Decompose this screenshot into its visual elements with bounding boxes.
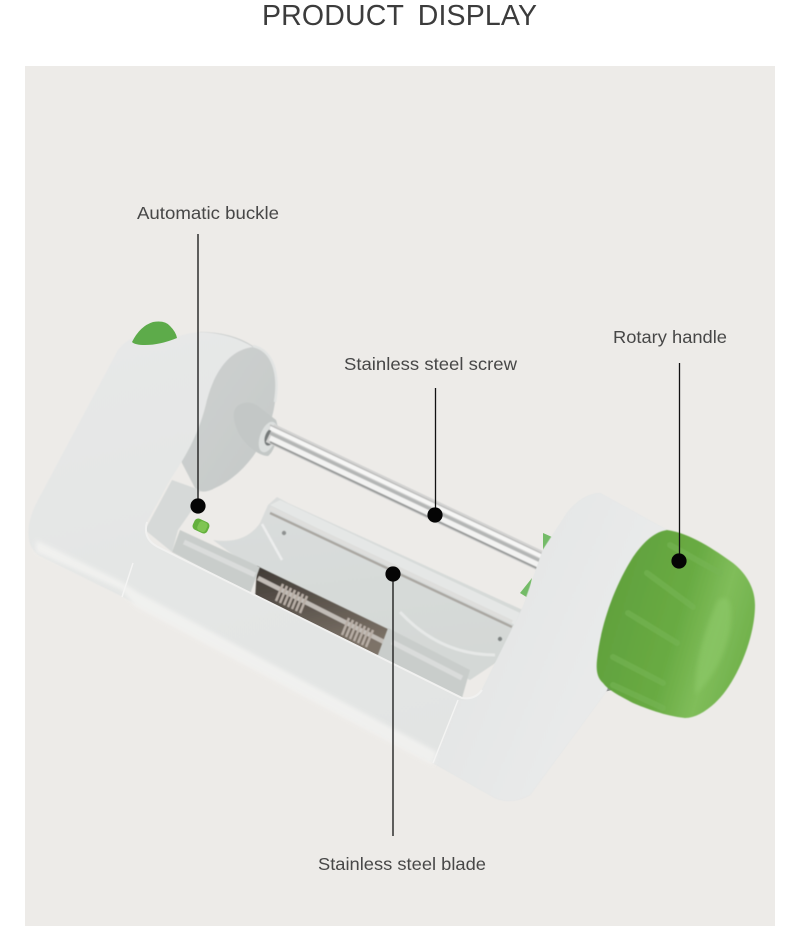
callout: stainless steel blade — [318, 566, 486, 874]
part: lower lip highlight — [36, 540, 437, 765]
part: end disc — [170, 332, 281, 492]
part: housing seams — [122, 563, 458, 763]
title: PRODUCT DISPLAY — [262, 0, 537, 32]
part: knob end highlight — [695, 598, 731, 695]
callout: automatic buckle: Automatic buckle — [137, 203, 279, 223]
part: blade tray — [213, 497, 527, 680]
product: vegetable spiralizer — [28, 322, 755, 801]
callout: stainless steel screw: Stainless steel screw — [344, 354, 517, 374]
part: knob edge shadow — [595, 530, 668, 692]
callout: automatic buckle — [137, 203, 279, 514]
part: axle hub — [234, 403, 278, 456]
part: green latch button — [191, 517, 211, 535]
part: spring left — [276, 584, 307, 613]
callout: stainless steel screw — [344, 354, 517, 523]
callout: rotary handle: Rotary handle — [613, 327, 727, 347]
part: main housing — [28, 332, 667, 801]
part: steel screw rod — [270, 425, 545, 572]
part: rollers — [145, 480, 470, 698]
part: cavity rim highlight — [146, 522, 482, 698]
part: green rotary knob — [597, 530, 755, 718]
callout: stainless steel blade: Stainless steel blade — [318, 854, 486, 874]
part: spring right — [342, 618, 373, 647]
part: spring chamber — [255, 566, 390, 660]
part: right arm shading — [433, 493, 667, 801]
part: green tabs — [520, 533, 552, 598]
callout: rotary handle — [613, 327, 727, 569]
part: knob ribs — [613, 545, 720, 708]
part: green top cap — [132, 322, 177, 345]
